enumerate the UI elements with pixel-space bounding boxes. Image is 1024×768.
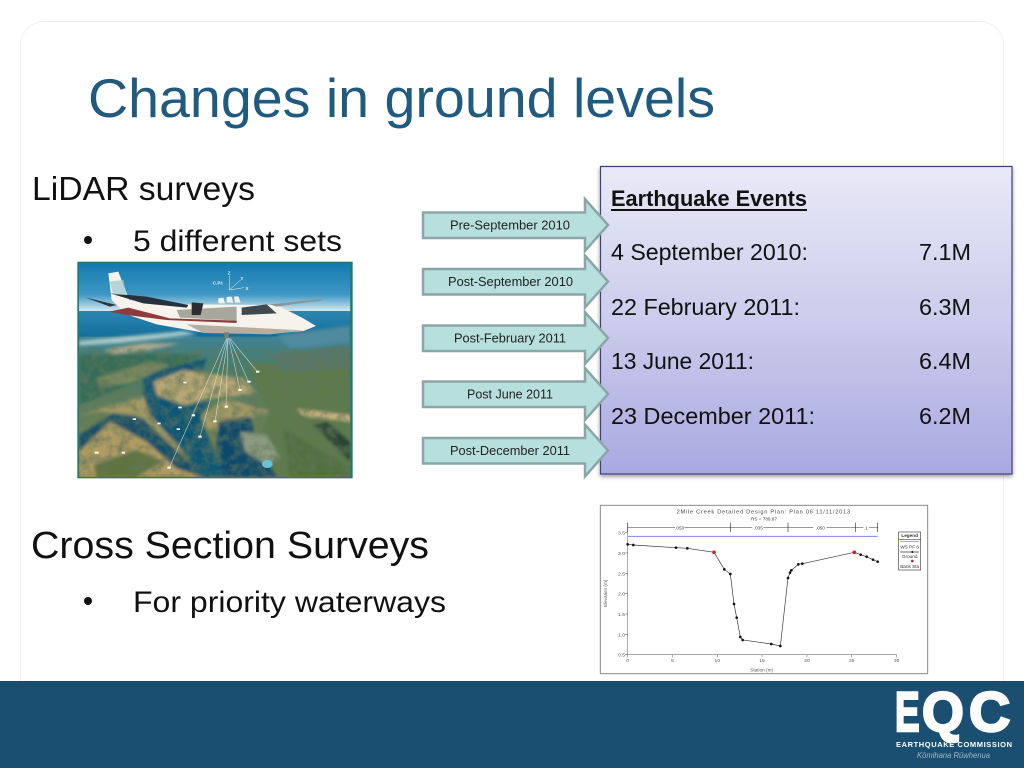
logo: EQC: Kōmihana Rūwhenua — [917, 750, 990, 760]
chart legend: WS PF 6 — [900, 545, 919, 550]
logo: EQC: E — [895, 681, 920, 744]
bullet: 5 different sets: 5 different sets — [133, 225, 342, 258]
chart axes: 30 — [894, 658, 900, 664]
title: Changes in ground levels — [88, 67, 715, 129]
logo: EQC: EARTHQUAKE COMMISSION — [896, 740, 1012, 749]
photo: survey plane over coast: C.P.t — [213, 280, 223, 285]
heading: LiDAR surveys: LiDAR surveys — [32, 170, 255, 207]
photo: survey plane over coast — [77, 262, 353, 478]
arrow: Pre-September 2010: Pre-September 2010 — [450, 218, 570, 232]
photo: laser beams — [169, 338, 257, 468]
event: 13 June 2011: 13 June 2011: — [611, 348, 754, 374]
chart: water surface — [628, 535, 878, 538]
chart: creek cross section — [600, 505, 928, 674]
chart: ground line — [626, 543, 879, 647]
event: 22 February 2011: 6.3M — [919, 294, 971, 320]
chart axes: Station (m) — [750, 668, 773, 673]
arrow: Post-December 2011: Post-December 2011 — [450, 444, 570, 458]
chart axes: 3.0 — [618, 551, 625, 557]
logo: EQC: Q — [922, 680, 964, 743]
chart axes: Elevation (m) — [603, 579, 608, 607]
arrow: Post-February 2011 — [423, 312, 608, 364]
chart axes: 1.0 — [618, 632, 625, 638]
chart axes: 3.5 — [618, 530, 625, 536]
arrow: Post June 2011 — [423, 368, 608, 420]
footer band — [0, 681, 1024, 768]
chart title: 2Mile Creek Detailed Design Plan: Plan 06 11/11/2013 — [677, 510, 850, 516]
chart title — [677, 510, 850, 521]
event: 4 September 2010: 4 September 2010: — [611, 239, 808, 265]
chart: manning values — [628, 523, 878, 532]
chart legend: Bank Sta — [900, 564, 920, 569]
bullet: For priority waterways: For priority waterways — [133, 586, 446, 619]
event: 13 June 2011 — [611, 348, 971, 374]
arrow: Post-December 2011 — [423, 424, 608, 476]
chart axes: 2.5 — [618, 571, 625, 577]
chart: manning values: .050 — [675, 525, 685, 530]
photo: survey plane over coast: X — [245, 286, 249, 291]
chart axes: 0.5 — [618, 653, 625, 659]
arrow: Post-September 2010: Post-September 2010 — [448, 275, 573, 289]
photo: survey plane over coast: Y — [240, 276, 244, 281]
chart: manning values: .035 — [754, 525, 763, 530]
chart legend: Legend — [901, 533, 918, 538]
panel heading: Earthquake Events — [611, 186, 807, 211]
arrow: Post June 2011: Post June 2011 — [467, 388, 553, 402]
event: 23 December 2011: 6.2M — [919, 403, 971, 429]
arrow: Post-September 2010 — [423, 256, 608, 308]
event: 22 February 2011 — [611, 294, 971, 320]
chart axes: 2.0 — [618, 592, 625, 598]
logo: EQC — [895, 680, 1012, 760]
chart axes: 15 — [759, 658, 765, 664]
chart title: RS = 789.87 — [751, 516, 777, 521]
photo: survey plane over coast: Z — [228, 270, 231, 275]
chart axes: 20 — [804, 658, 810, 664]
event: 23 December 2011 — [611, 403, 971, 429]
chart axes: 1.5 — [618, 612, 625, 618]
logo: EQC: C — [969, 681, 1010, 743]
chart: manning values: .1 — [864, 525, 868, 530]
chart axes: 0 — [626, 658, 629, 664]
chart axes: 10 — [715, 658, 720, 664]
photo: axes marker — [229, 276, 244, 290]
arrow: Pre-September 2010 — [423, 199, 608, 251]
chart legend — [899, 532, 921, 570]
event: 4 September 2010 — [611, 239, 971, 265]
arrow: Post-February 2011: Post-February 2011 — [454, 332, 566, 346]
photo terrain — [79, 326, 350, 477]
event: 4 September 2010: 7.1M — [919, 239, 971, 265]
arrows: survey dates — [423, 199, 608, 476]
event: 23 December 2011: 23 December 2011: — [611, 403, 815, 429]
chart legend: Ground — [902, 554, 918, 559]
photo: plane — [85, 272, 322, 338]
event: 13 June 2011: 6.4M — [919, 348, 971, 374]
chart axes: 5 — [671, 658, 674, 664]
chart axes — [603, 523, 900, 673]
heading: Cross Section Surveys: Cross Section Surveys — [31, 525, 429, 567]
event: 22 February 2011: 22 February 2011: — [611, 294, 800, 320]
photo texture — [79, 348, 350, 477]
panel: earthquake events — [600, 166, 1012, 474]
chart: manning values: .050 — [816, 525, 825, 530]
chart axes: 25 — [849, 658, 855, 664]
